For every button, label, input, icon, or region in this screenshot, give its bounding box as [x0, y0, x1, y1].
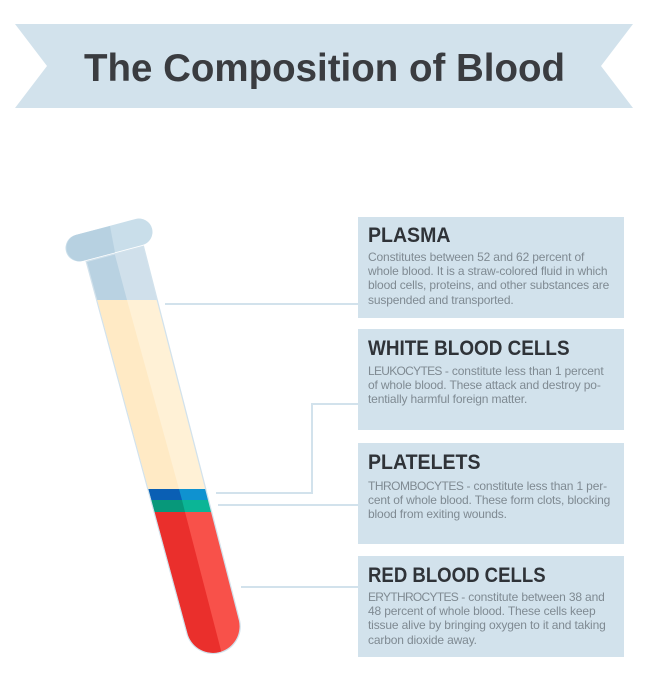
heading: platelets: PLATELETS	[368, 451, 480, 474]
tube cap	[66, 226, 139, 261]
text: white blood cells description: LEUKOCYTES - constitute less than 1 percent	[368, 364, 604, 378]
connector: white blood cells	[216, 404, 358, 493]
empty upper tube	[80, 240, 250, 300]
text: platelets description: blood from exiting wounds.	[368, 507, 507, 521]
connector: platelets	[218, 504, 358, 506]
icon: test tube	[66, 226, 260, 662]
text: red blood cells description: ERYTHROCYTES - constitute between 38 and	[368, 590, 605, 604]
text: white blood cells description: of whole blood. These attack and destroy po-	[368, 378, 601, 392]
connector: plasma	[165, 303, 358, 305]
red blood cells layer	[154, 512, 240, 653]
plasma layer	[97, 300, 205, 489]
text: platelets description: THROMBOCYTES - constitute less than 1 per-	[368, 479, 607, 493]
text: plasma description: whole blood. It is a straw-colored fluid in which	[368, 264, 607, 278]
panel: platelets	[358, 443, 624, 544]
tube shadow side	[87, 254, 222, 653]
panel: plasma	[358, 217, 624, 318]
text: platelets description: cent of whole blood. These form clots, blocking	[368, 493, 610, 507]
text: red blood cells description: tissue alive by bringing oxygen to it and taking	[368, 618, 606, 632]
heading: red blood cells: RED BLOOD CELLS	[368, 564, 546, 587]
title: The Composition of Blood	[84, 47, 565, 90]
tube contents	[87, 254, 240, 653]
text: plasma description: Constitutes between 52 and 62 percent of	[368, 250, 584, 264]
text: red blood cells description: carbon dioxide away.	[368, 633, 477, 647]
text: platelets description	[368, 479, 610, 521]
platelets layer	[152, 500, 211, 512]
panel: red blood cells	[358, 556, 624, 657]
heading: white blood cells: WHITE BLOOD CELLS	[368, 337, 570, 360]
panel: white blood cells	[358, 329, 624, 430]
text: white blood cells description: tentially harmful foreign matter.	[368, 392, 527, 406]
text: plasma description: blood cells, proteins, and other substances are	[368, 278, 609, 292]
text: plasma description: suspended and transported.	[368, 293, 514, 307]
white blood cells layer	[148, 489, 208, 500]
connector: red blood cells	[241, 586, 358, 588]
heading: plasma: PLASMA	[368, 224, 450, 247]
text: plasma description	[368, 250, 609, 307]
tube glass outline	[87, 247, 240, 653]
text: white blood cells description	[368, 364, 604, 406]
title banner ribbon	[15, 24, 633, 108]
text: red blood cells description	[368, 590, 606, 647]
text: red blood cells description: 48 percent of whole blood. These cells keep	[368, 604, 595, 618]
